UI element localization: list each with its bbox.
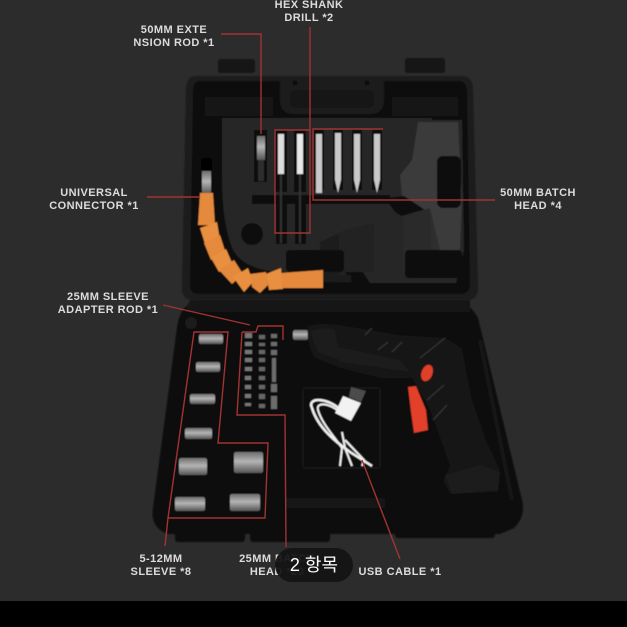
red trigger — [408, 386, 428, 433]
image count badge — [275, 548, 353, 582]
line: extension rod — [221, 34, 261, 134]
label: usb cable: USB CABLE *1 — [358, 566, 442, 578]
left hose channel — [198, 118, 340, 288]
line: universal connector — [147, 196, 200, 198]
corner highlight — [185, 317, 197, 329]
gray drill impression — [400, 122, 462, 252]
base top edge — [185, 300, 470, 312]
base lower step — [280, 470, 392, 528]
line: hex shank box — [275, 27, 310, 233]
line: usb cable — [362, 460, 400, 559]
callout lines — [147, 27, 495, 559]
label: universal connector: UNIVERSAL — [60, 187, 128, 199]
label: extension rod: 50MM EXTE — [141, 24, 207, 36]
drill right wall — [480, 340, 512, 500]
lid rim — [190, 81, 470, 294]
label: extension rod: NSION ROD *1 — [133, 37, 215, 49]
label: sleeves: SLEEVE *8 — [131, 566, 191, 578]
panel: open case base — [153, 300, 523, 542]
batch heads set — [245, 333, 277, 409]
lid latch tabs — [218, 58, 445, 73]
lid upper pockets — [198, 80, 466, 118]
label: sleeve adapter rod: 25MM SLEEVE — [67, 291, 149, 303]
label: hex shank drill: DRILL *2 — [284, 12, 334, 24]
label: 25mm batch head: 25MM BATCH — [239, 553, 315, 565]
hex shank drills — [278, 134, 303, 243]
sleeves — [175, 334, 263, 511]
line: sleeves outline — [165, 332, 268, 546]
lid tool plateau — [222, 118, 464, 284]
red button — [419, 363, 435, 383]
label: universal connector: CONNECTOR *1 — [49, 200, 139, 212]
label: sleeves: 5-12MM — [139, 553, 183, 565]
line: batch head box — [313, 129, 495, 200]
base outer shell — [153, 304, 523, 534]
lid lower pockets — [286, 250, 462, 278]
extension rod — [257, 136, 265, 181]
usb plug — [335, 387, 366, 421]
bottom black bar — [0, 601, 627, 627]
line: batch heads outline — [237, 326, 286, 547]
label: batch head: 50MM BATCH — [500, 187, 576, 199]
batch heads — [316, 133, 380, 193]
image count badge: 2 항목 — [290, 555, 338, 575]
line: sleeve adapter — [163, 305, 250, 325]
hose black end — [324, 275, 351, 281]
base feet — [175, 530, 495, 542]
label: batch head: HEAD *4 — [514, 200, 562, 212]
universal connector metal tip — [202, 171, 211, 194]
bit slots — [241, 130, 390, 245]
label: sleeve adapter rod: ADAPTER ROD *1 — [58, 304, 158, 316]
label: 25mm batch head: HEAD *20 — [250, 566, 304, 578]
electric screwdriver — [293, 324, 500, 494]
usb cable — [311, 400, 372, 466]
lid outer shell — [182, 76, 478, 300]
universal connector orange hose — [198, 193, 323, 293]
panel: open case lid — [182, 58, 478, 300]
usb compartment — [303, 388, 380, 468]
